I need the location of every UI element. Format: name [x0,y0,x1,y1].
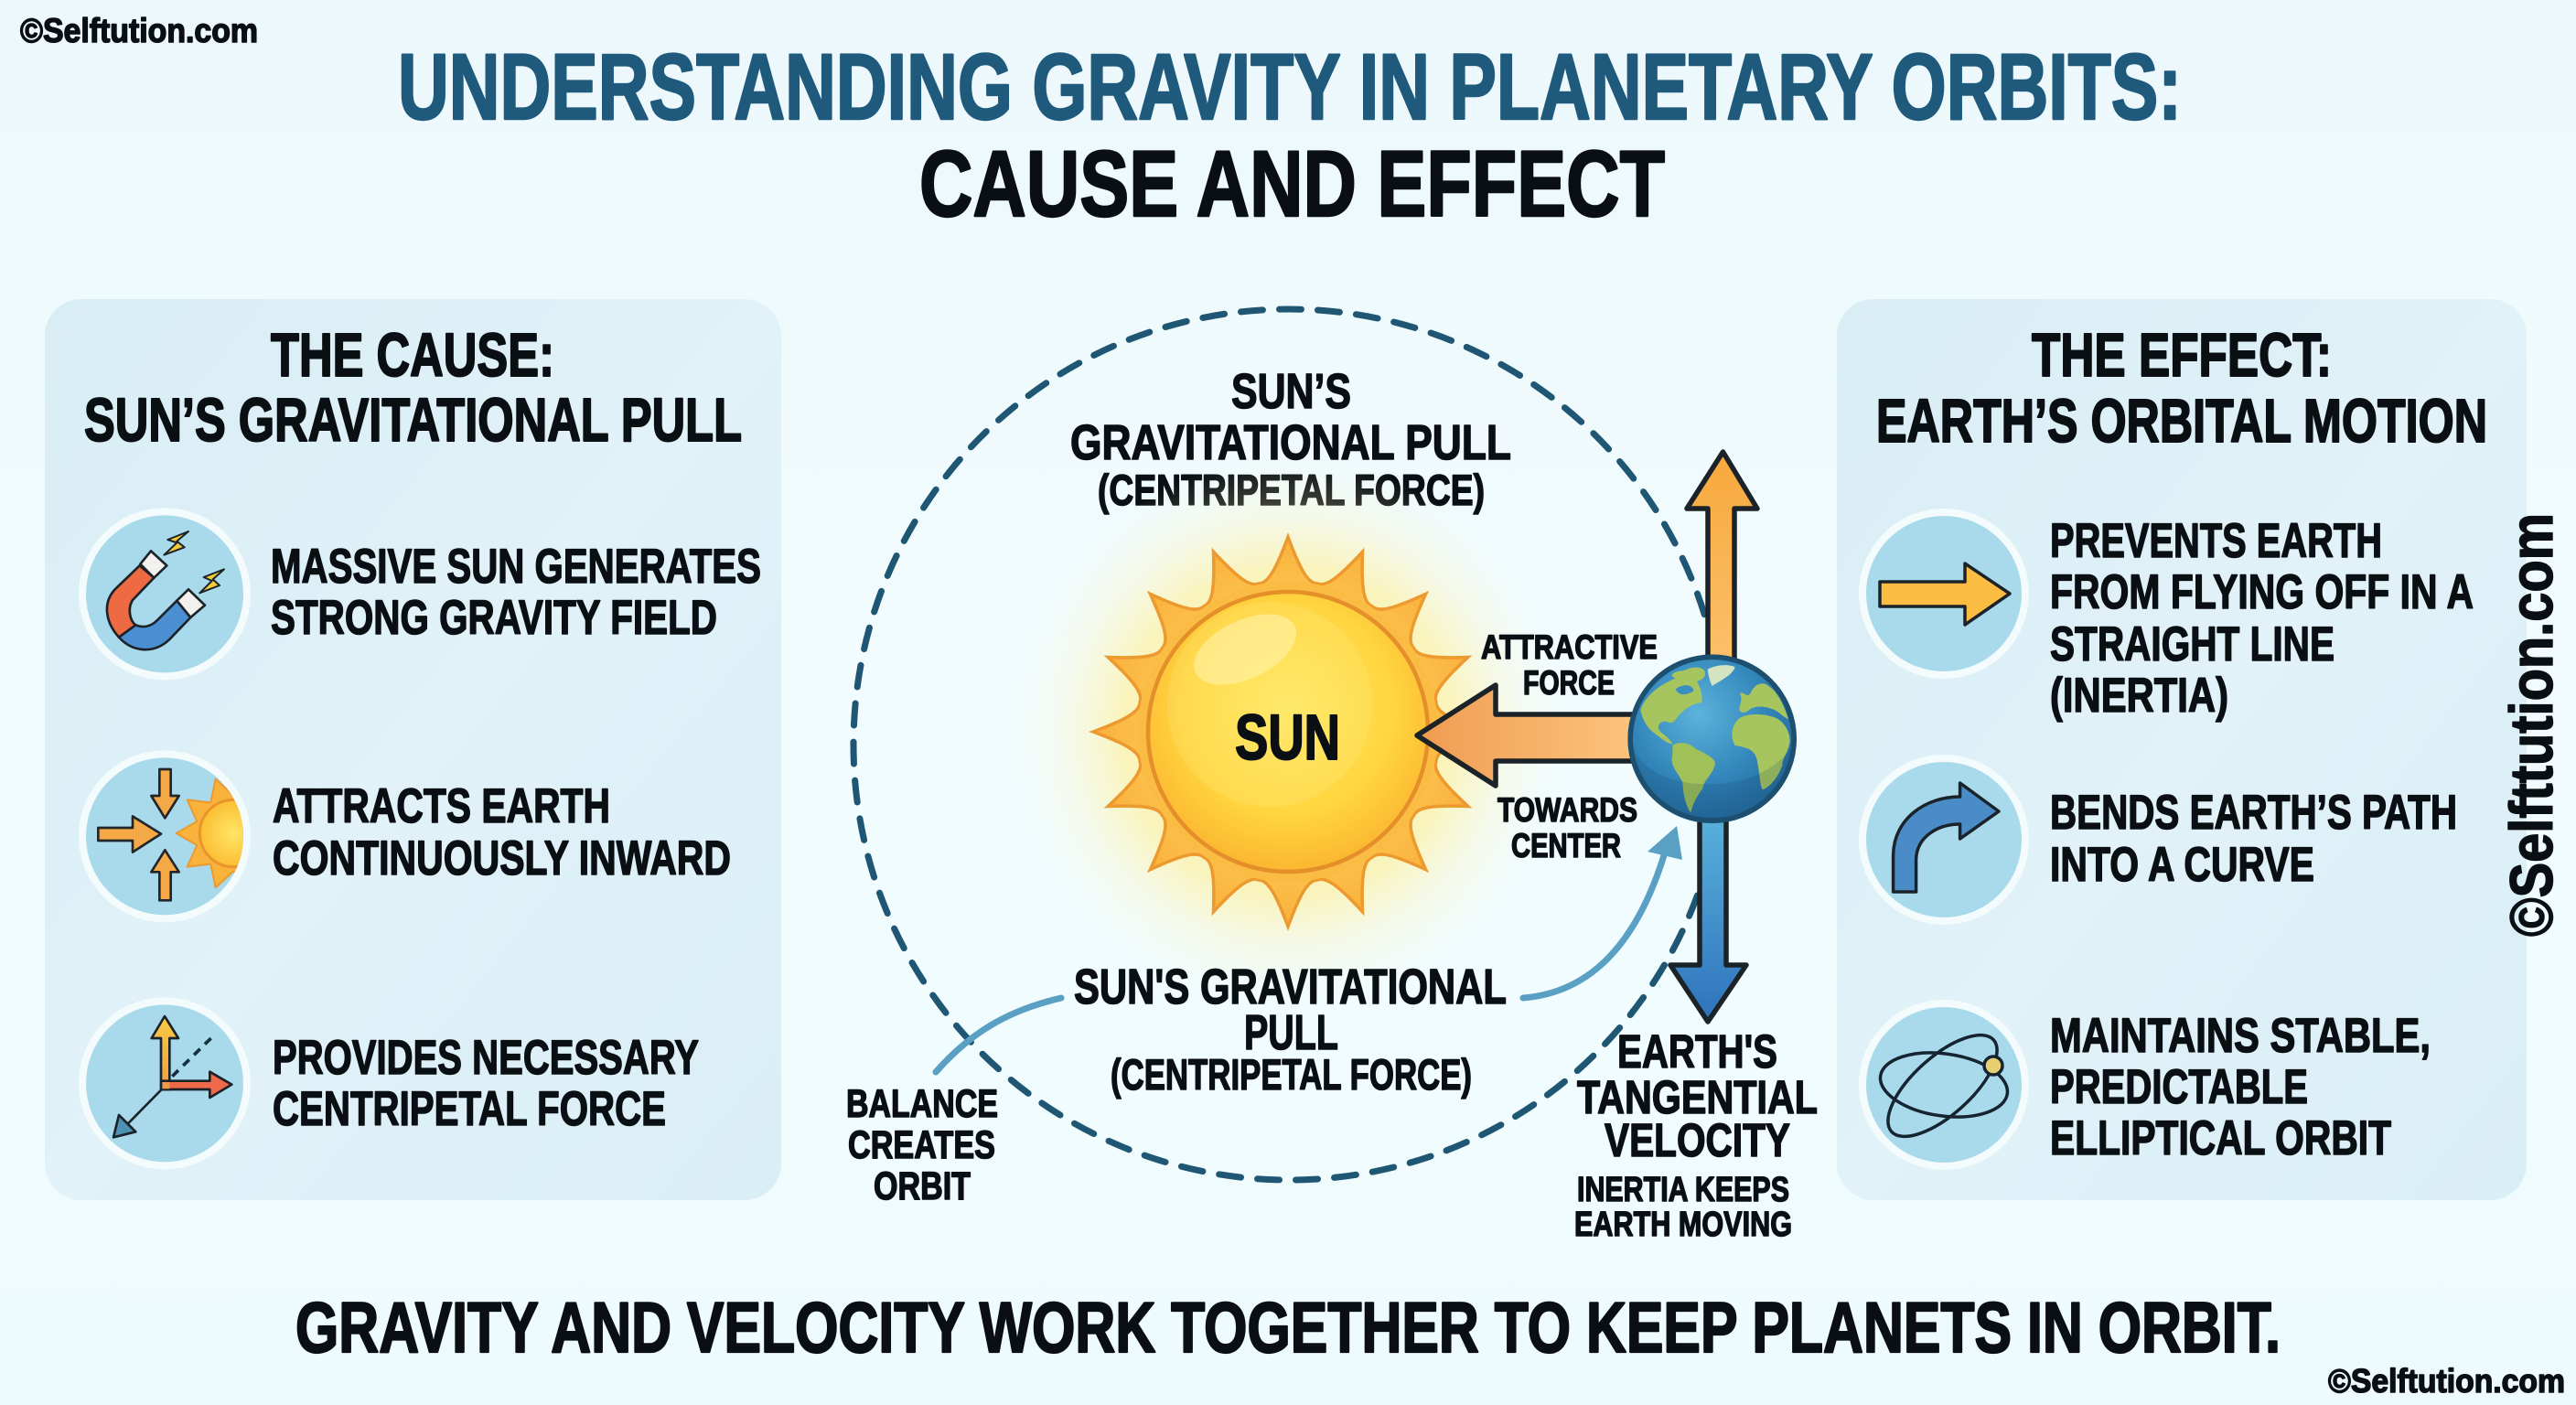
label: earth's tangential velocity: EARTH'S [1617,1025,1777,1078]
arrow: attractive force to sun [1417,685,1637,786]
label: sun's gravitational pull bottom: PULL [1244,1005,1338,1060]
text: bends path: BENDS EARTH’S PATH [2050,786,2457,840]
panel: the cause [45,299,781,1200]
text: provides centripetal: CENTRIPETAL FORCE [273,1082,666,1136]
arrow: tangential down blue [1670,814,1746,1022]
text: massive sun: STRONG GRAVITY FIELD [271,591,717,645]
label: inertia keeps earth moving: EARTH MOVING [1574,1206,1792,1244]
label: earth's tangential velocity: TANGENTIAL [1577,1071,1818,1123]
label: inertia keeps earth moving: INERTIA KEEPS [1577,1171,1789,1209]
text: massive sun: MASSIVE SUN GENERATES [271,540,761,594]
diagram label: sun's gravitational pull top: (CENTRIPETAL FORCE) [1098,466,1485,514]
watermark: bottom right: ©Selftution.com [2328,1362,2565,1400]
text: maintains orbit: MAINTAINS STABLE, [2050,1009,2431,1063]
label: sun's gravitational pull bottom [1074,960,1507,1099]
label: sun's gravitational pull bottom: (CENTRIPETAL FORCE) [1111,1050,1472,1099]
diagram label: sun's gravitational pull top: GRAVITATIONAL PULL [1070,415,1511,470]
label: towards center: TOWARDS [1497,791,1637,829]
heading: the cause [84,321,742,455]
label: balance creates orbit: BALANCE [846,1082,998,1126]
label: balance creates orbit [846,1082,998,1208]
orbit: dashed circle [853,309,1724,1180]
arrow: curved blue to earth [1523,826,1682,998]
text: prevents earth: PREVENTS EARTH [2050,514,2382,568]
shading: lower crescent [1632,747,1792,820]
title: CAUSE AND EFFECT [919,132,1665,236]
continent: north america [1640,668,1705,744]
label: towards center [1497,791,1637,864]
continent: south america [1672,743,1715,812]
text: prevents earth: (INERTIA) [2050,669,2228,723]
label: earth's tangential velocity: VELOCITY [1605,1114,1790,1166]
label: balance creates orbit: CREATES [848,1123,995,1167]
icon: curved arrow [1862,758,2025,921]
earth [1630,657,1794,820]
title [398,35,2182,236]
text: prevents earth [2050,514,2474,723]
heading: the cause: THE CAUSE: [271,321,554,390]
heading: the effect: THE EFFECT: [2032,321,2332,390]
label: inertia keeps earth moving [1574,1171,1792,1244]
continent: greenland [1708,665,1735,686]
label: towards center: CENTER [1511,827,1621,864]
text: attracts earth: ATTRACTS EARTH [273,779,610,833]
label: attractive force: ATTRACTIVE [1481,628,1658,666]
text: massive sun [271,540,761,645]
text: maintains orbit: PREDICTABLE [2050,1060,2308,1114]
sun label: SUN [1235,702,1340,773]
text: bends path [2050,786,2457,892]
text: provides centripetal [273,1031,699,1136]
text: prevents earth: STRAIGHT LINE [2050,617,2334,671]
continent: eurasia [1739,683,1788,720]
text: provides centripetal: PROVIDES NECESSARY [273,1031,699,1085]
icon: magnet [82,511,247,676]
continent: africa [1732,714,1790,789]
icon: elliptical orbit [1862,1003,2025,1166]
label: attractive force: FORCE [1523,664,1615,702]
icon: force vectors [82,1001,247,1165]
icon: attraction arrows and sun [82,754,268,918]
text: attracts earth [273,779,731,885]
sun [1014,457,1562,1006]
watermark: top left: ©Selftution.com [20,12,258,49]
label: balance creates orbit: ORBIT [874,1164,971,1208]
connector: balance line [936,998,1061,1072]
label: sun's gravitational pull bottom: SUN'S GRAVITATIONAL [1074,960,1507,1014]
label: attractive force [1481,628,1658,702]
text: attracts earth: CONTINUOUSLY INWARD [273,831,731,885]
arrow: tangential up orange [1687,452,1757,663]
icon: straight arrow [1862,512,2025,675]
text: maintains orbit [2050,1009,2431,1165]
panel: the effect [1837,299,2527,1200]
text: bends path: INTO A CURVE [2050,838,2314,892]
diagram label: sun's gravitational pull top [1070,364,1511,514]
heading: the effect [1876,321,2487,456]
heading: the cause: SUN’S GRAVITATIONAL PULL [84,386,742,455]
text: maintains orbit: ELLIPTICAL ORBIT [2050,1111,2391,1165]
watermark: vertical: ©Selfttution.com [2497,513,2565,937]
label: earth's tangential velocity [1577,1025,1818,1166]
diagram label: sun's gravitational pull top: SUN’S [1231,364,1351,419]
